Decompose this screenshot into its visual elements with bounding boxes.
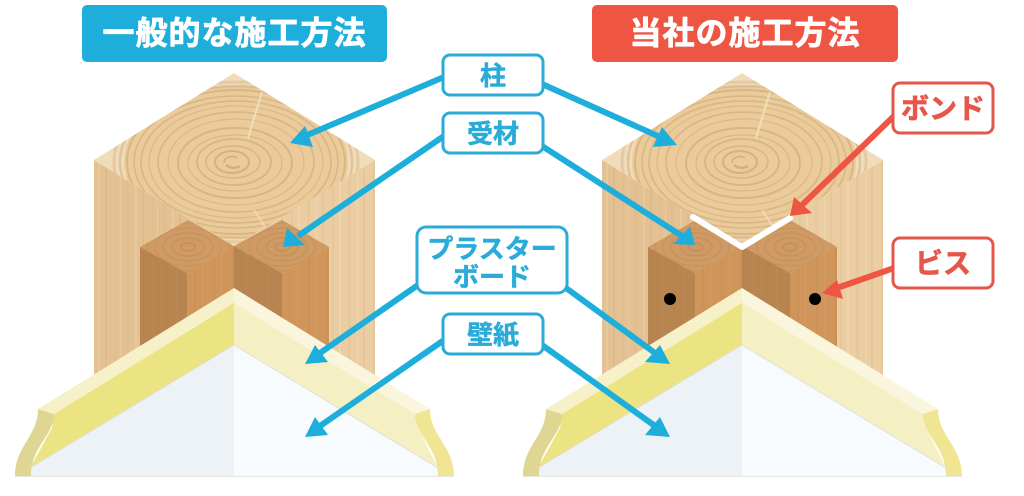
label: plasterboard (417, 227, 567, 293)
receiving blocks: left diagram (140, 220, 329, 350)
plasterboard and wallpaper moulding: left diagram (15, 288, 454, 477)
label: bond: ボンド (901, 93, 985, 124)
receiving blocks: right diagram (648, 220, 837, 350)
label: screw (893, 238, 993, 288)
heading: general method: 一般的な施工方法 (102, 15, 367, 51)
post: left diagram (94, 73, 375, 376)
label: receiving member: 受材 (467, 119, 519, 149)
heading: general method (82, 5, 387, 62)
red arrow: screw (822, 268, 894, 299)
plasterboard and wallpaper moulding: right diagram (523, 288, 962, 477)
blue arrows: left (283, 77, 444, 437)
label: receiving member (443, 113, 543, 153)
label: wallpaper: 壁紙 (467, 320, 519, 350)
label: plasterboard: ボード (453, 262, 531, 292)
bond line (693, 217, 790, 247)
label: screw: ビス (915, 248, 971, 279)
label: wallpaper (443, 314, 543, 354)
blue arrows: right (542, 84, 695, 437)
post: right diagram (602, 73, 883, 376)
screws (664, 293, 821, 305)
heading: our method: 当社の施工方法 (629, 15, 861, 51)
red arrow: bond (790, 116, 894, 216)
label: post: 柱 (480, 61, 506, 91)
label: post (443, 55, 543, 95)
label: bond (893, 83, 993, 133)
heading: our method (592, 5, 898, 62)
label: plasterboard: プラスター (427, 234, 557, 264)
